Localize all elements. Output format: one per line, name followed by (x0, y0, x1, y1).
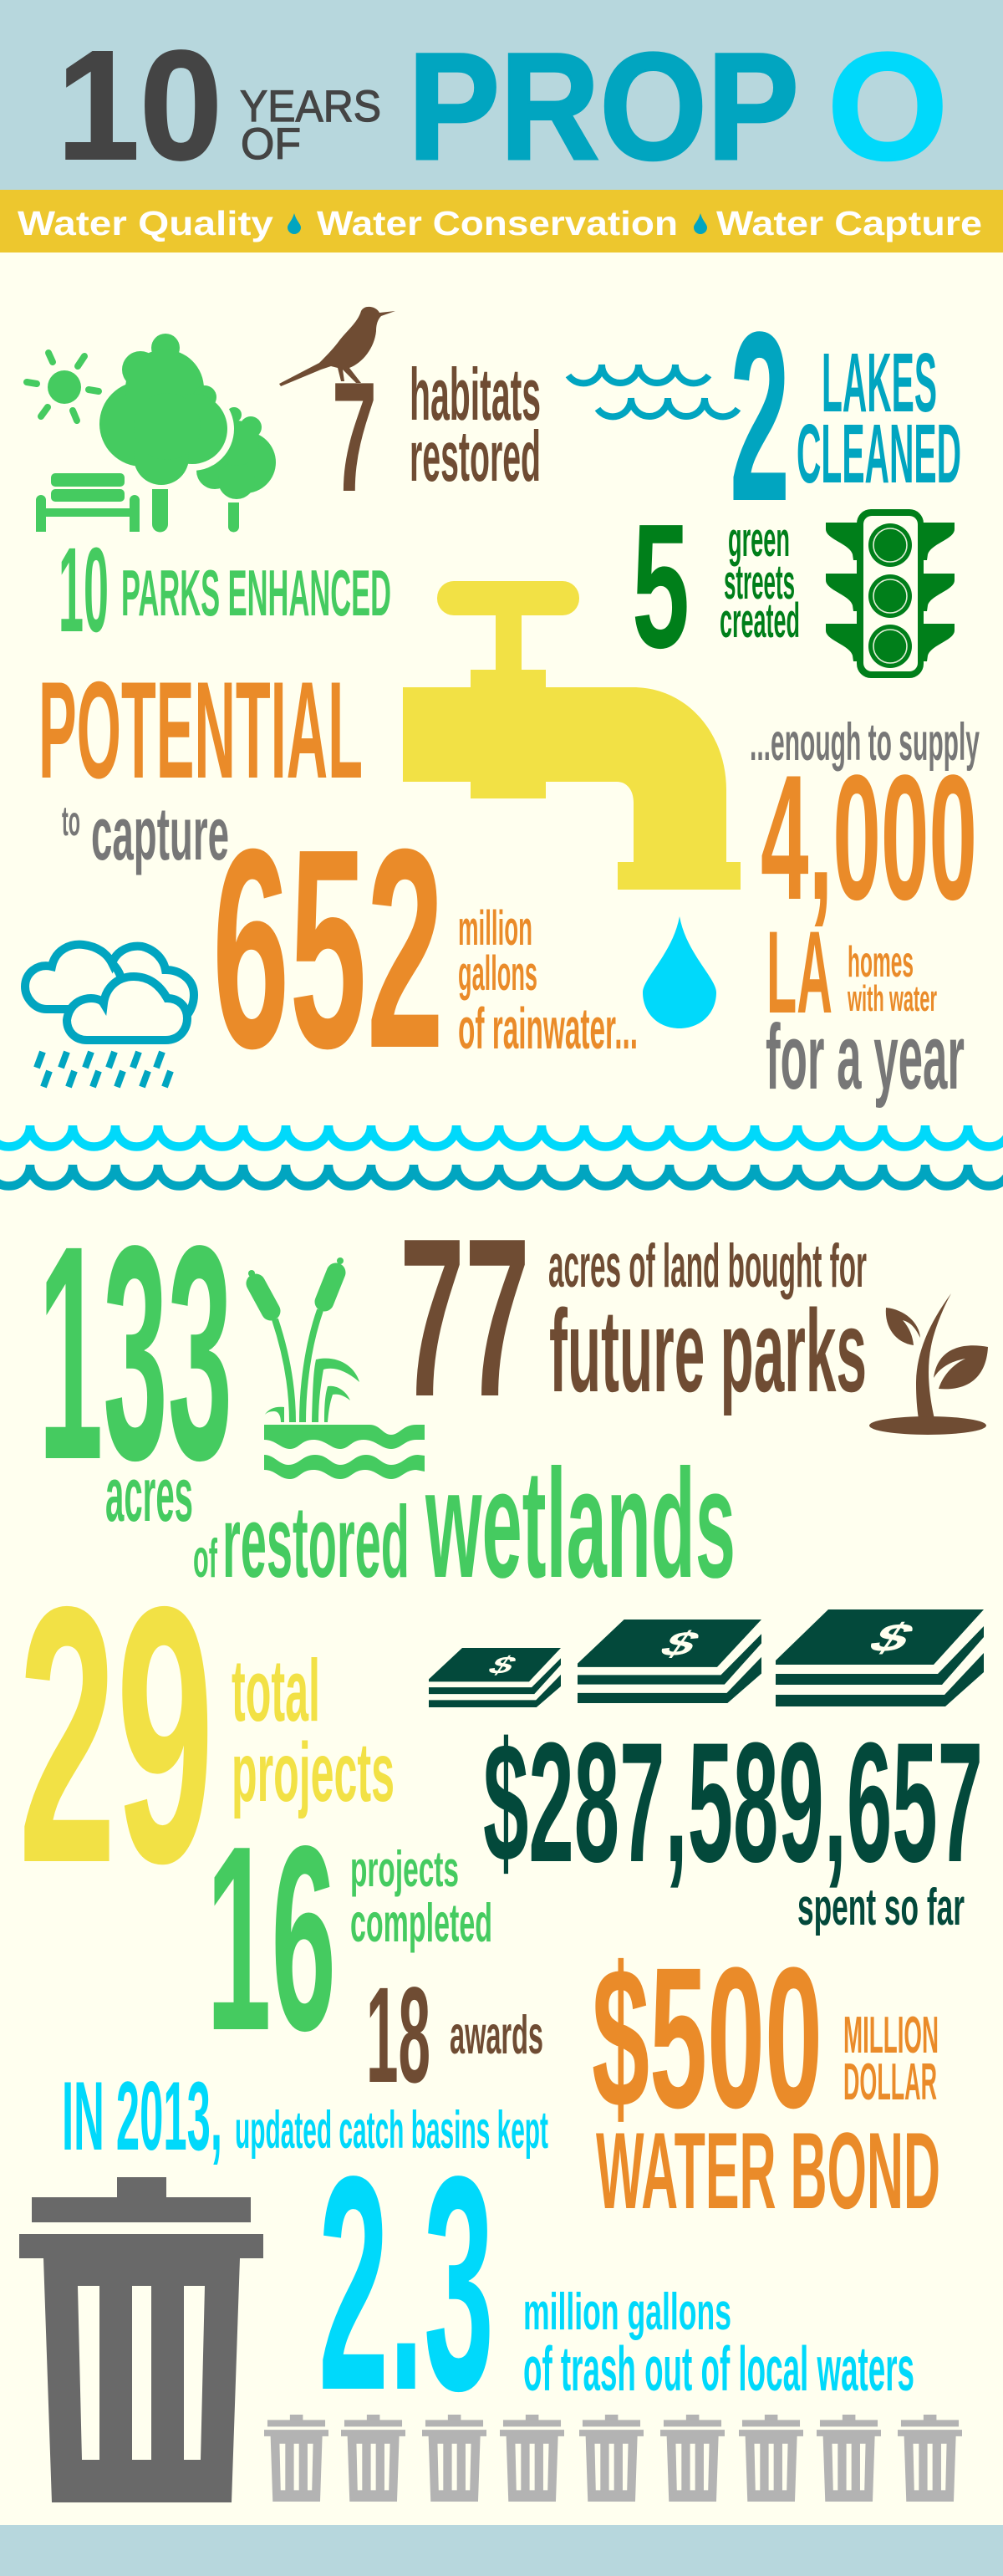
stat: $500 million dollar water bond (592, 1926, 940, 2232)
icon: drop 2 (694, 213, 707, 234)
icon: money stack large: $ (859, 1615, 924, 1660)
stat: 77 acres of land bought for future parks (400, 1192, 867, 1444)
text: POTENTIAL (38, 653, 363, 807)
stat: 652 million gallons of rainwater: million (458, 901, 532, 956)
stat: 2.3 million gallons of trash: 2.3 (318, 2114, 494, 2454)
subtitle band (0, 190, 1003, 252)
icon: faucet (403, 581, 741, 890)
icon: park with sun, trees and bench (27, 334, 276, 532)
title: 10: 10 (57, 19, 222, 192)
text: streets (724, 555, 795, 610)
subtitle band: Water Conservation (317, 204, 678, 242)
subtitle band: Water Capture (716, 204, 982, 242)
icons: row of small trash cans (264, 2415, 962, 2502)
text: created (720, 594, 800, 648)
stat: 16 projects completed: 16 (206, 1791, 336, 2085)
stat: 133 acres of restored wetlands: acres (105, 1452, 193, 1538)
stat: 4,000 LA homes: LA (766, 906, 832, 1038)
icon: sprout (869, 1293, 988, 1435)
text: to capture: to (62, 798, 80, 844)
icon: rain cloud (25, 945, 194, 1087)
icon: money stack medium (578, 1620, 761, 1703)
text: habitats (410, 353, 541, 436)
stat: 133 acres of restored wetlands: 133 (38, 1183, 232, 1523)
stat: 77 acres of land bought for future parks: 77 (400, 1192, 530, 1444)
text: restored (410, 417, 541, 497)
text: in 2013 updated catch basins kept: IN 2013, (62, 2061, 222, 2170)
stat: 133 acres of restored wetlands: restored (222, 1485, 410, 1599)
icon: bird (279, 307, 395, 386)
text: awards (450, 2004, 543, 2065)
title: prop: PROP (408, 21, 799, 191)
stat: 4,000 LA homes (761, 738, 977, 1038)
icon: water drop (643, 916, 716, 1028)
stat: 652 million gallons of rainwater: gallons (458, 946, 537, 1001)
stat: 10 parks enhanced (59, 523, 391, 657)
stat: 133 acres of restored wetlands (38, 1183, 736, 1610)
icon: money stack small: $ (481, 1651, 523, 1679)
stat: 133 acres of restored wetlands: of (193, 1528, 217, 1589)
text: PARKS ENHANCED (121, 556, 391, 630)
icon: lake waves (568, 365, 738, 416)
text: of rainwater... (458, 996, 638, 1061)
stat: 4,000 LA homes: homes (848, 938, 914, 987)
stat: 18 awards: 18 (366, 1958, 430, 2111)
icon: money stack small (429, 1648, 561, 1707)
icon: wetland reeds (248, 1257, 425, 1479)
icon: large trash can (19, 2177, 263, 2502)
icon: money stack large (776, 1609, 984, 1706)
stat: 29 total projects: total (232, 1642, 320, 1740)
stat: 29 total projects: projects (232, 1726, 395, 1819)
stat: 7 habitats restored (332, 349, 541, 524)
stat: 16 projects completed: completed (350, 1892, 492, 1953)
stat: 2 lakes cleaned: 2 (730, 282, 790, 552)
text: updated catch basins kept (235, 2101, 548, 2160)
stat: 5 green streets created (632, 487, 800, 685)
stat: 16 projects completed: projects (350, 1841, 459, 1897)
icon: traffic light (826, 509, 955, 678)
stat: 5 green streets created: 5 (632, 487, 690, 685)
stat: 5 green streets created: green (728, 513, 790, 567)
title: years of (240, 82, 381, 169)
text: to capture (62, 793, 229, 876)
stat: 652 million gallons of rainwater: 652 (212, 790, 444, 1108)
header panel (0, 0, 1003, 192)
icon: drop 1 (288, 213, 301, 234)
title: years of: YEARS (240, 82, 381, 131)
stat: 29 total projects: 29 (18, 1530, 214, 1939)
stat: 2 lakes cleaned (730, 282, 961, 552)
icon: money stack medium: $ (651, 1625, 709, 1663)
title: years of: OF (241, 120, 301, 169)
stat: 2.3 million gallons of trash: million gallons (523, 2283, 731, 2341)
stat: 7 habitats restored: 7 (332, 349, 377, 524)
footer band (0, 2525, 1003, 2576)
stat: 10 parks enhanced: 10 (59, 523, 109, 657)
title: O: O (827, 21, 948, 191)
subtitle band: Water Quality (18, 204, 273, 242)
text: to capture: capture (91, 793, 229, 876)
